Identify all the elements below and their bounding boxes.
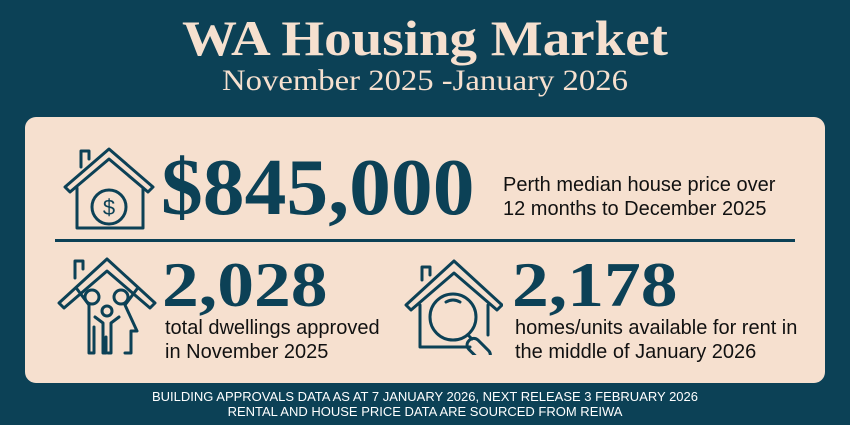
text: approvals description: in November 2025 <box>165 341 328 363</box>
icon: house with dollar <box>63 148 155 230</box>
text: approvals description <box>165 317 380 363</box>
panel: stats <box>25 117 825 383</box>
big number: approvals: 2,028 <box>162 249 328 320</box>
text: approvals description: total dwellings approved <box>165 317 380 339</box>
text: rentals description <box>515 317 797 363</box>
big number: median price: $845,000 <box>161 144 474 232</box>
text: median price description: Perth median house price over <box>503 174 775 196</box>
text: rentals description: the middle of January 2026 <box>515 341 756 363</box>
icon: house with dollar: $ <box>103 195 115 220</box>
text: rentals description: homes/units available for rent in <box>515 317 797 339</box>
footer note <box>152 389 698 419</box>
icon: family in house <box>57 257 157 354</box>
icon: house with magnifier <box>404 259 503 355</box>
big number: rentals: 2,178 <box>512 249 678 320</box>
footer note: BUILDING APPROVALS DATA AS AT 7 JANUARY 2026, NEXT RELEASE 3 FEBRUARY 2026 <box>152 389 698 404</box>
text: median price description: 12 months to December 2025 <box>503 198 766 220</box>
title: WA Housing Market <box>182 10 668 66</box>
subtitle: November 2025 -January 2026 <box>222 64 628 97</box>
text: median price description <box>503 174 776 220</box>
footer note: RENTAL AND HOUSE PRICE DATA ARE SOURCED FROM REIWA <box>228 404 622 419</box>
